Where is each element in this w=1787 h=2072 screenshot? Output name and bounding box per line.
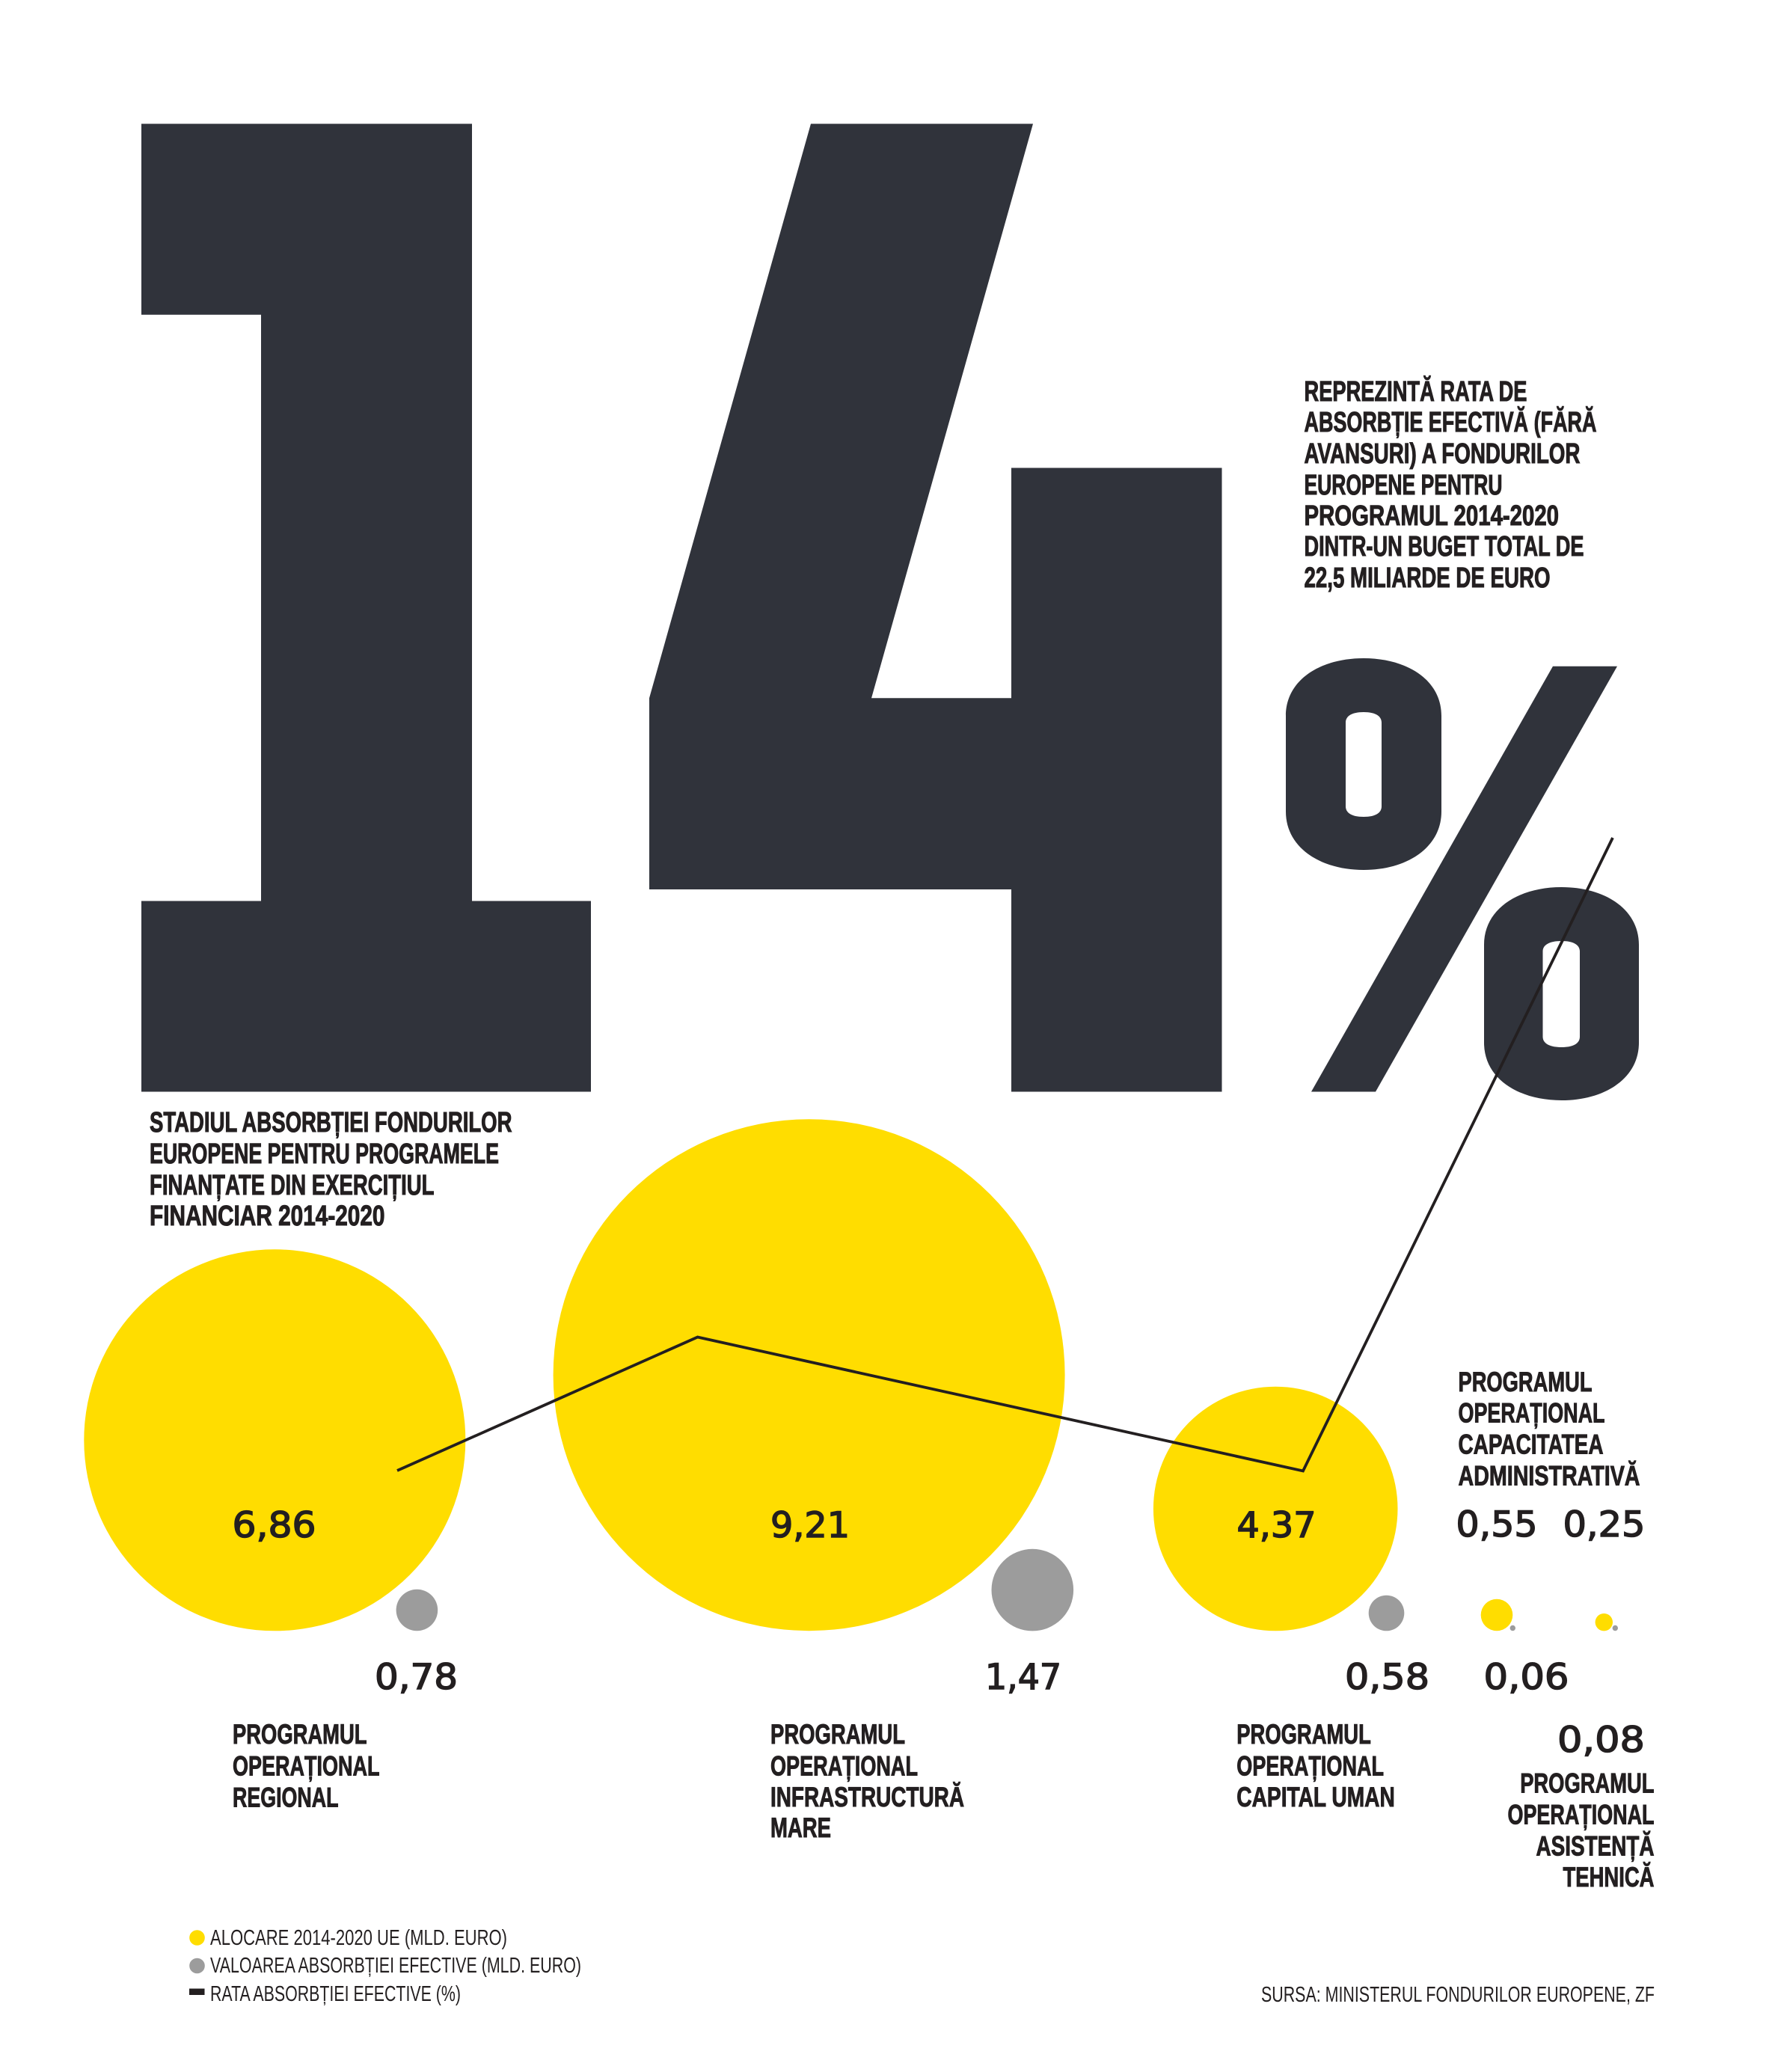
allocation: asistenta tehnica: [1596, 1613, 1613, 1631]
digit 1: [141, 124, 591, 1092]
label: programul operațional capacitatea administrativă: ADMINISTRATIVĂ: [1459, 1460, 1640, 1492]
heading: stadiul absorbției: STADIUL ABSORBȚIEI FONDURILOR: [150, 1107, 512, 1138]
text block: description of 14%: DINTR-UN BUGET TOTAL DE: [1305, 531, 1584, 563]
headline number: 14%: [141, 124, 1639, 1100]
allocation: infrastructura mare: [554, 1119, 1065, 1631]
legend: [189, 1926, 581, 2006]
value: 4,37: 4,37: [1237, 1505, 1317, 1546]
allocation: regional: [84, 1249, 465, 1631]
legend text: rata: RATA ABSORBȚIEI EFECTIVE (%): [210, 1982, 461, 2006]
legend marker: grey: [189, 1958, 205, 1973]
absorption: capacitatea administrativa: [1510, 1625, 1515, 1631]
label: programul operațional asistență tehnică: ASISTENȚĂ: [1536, 1831, 1655, 1863]
label: programul operațional capital uman: PROGRAMUL: [1236, 1719, 1371, 1750]
label: programul operațional regional: OPERAȚIONAL: [233, 1750, 380, 1782]
heading: stadiul absorbției: FINANȚATE DIN EXERCIȚIUL: [150, 1170, 434, 1201]
heading: stadiul absorbției: EUROPENE PENTRU PROGRAMELE: [150, 1138, 499, 1170]
label: programul operațional infrastructură mare: INFRASTRUCTURĂ: [770, 1782, 964, 1812]
label: programul operațional asistență tehnică: [1508, 1768, 1655, 1892]
legend marker: line: [189, 1988, 205, 1995]
label: programul operațional asistență tehnică: OPERAȚIONAL: [1508, 1800, 1655, 1831]
absorption: asistenta tehnica: [1613, 1625, 1618, 1631]
text block: description of 14%: [1305, 375, 1596, 594]
absorption: regional: [396, 1590, 438, 1631]
label: programul operațional capacitatea administrativă: [1459, 1367, 1640, 1492]
value: 0,08: 0,08: [1557, 1720, 1645, 1761]
allocation: capital uman: [1153, 1387, 1397, 1631]
line chart: effective absorption rate: [397, 838, 1613, 1471]
absorption: capital uman: [1369, 1596, 1404, 1631]
value: 9,21: 9,21: [770, 1505, 850, 1546]
label: programul operațional regional: PROGRAMUL: [233, 1719, 367, 1750]
text block: description of 14%: AVANSURI) A FONDURILOR: [1305, 438, 1580, 470]
value: 0,78: 0,78: [375, 1657, 458, 1698]
label: programul operațional capital uman: [1236, 1719, 1395, 1812]
label: programul operațional infrastructură mare: [770, 1719, 964, 1843]
bubble chart: allocation circles: [84, 1119, 1613, 1631]
heading: stadiul absorbției: FINANCIAR 2014-2020: [150, 1201, 384, 1232]
value labels: [232, 1504, 1646, 1761]
label: programul operațional capacitatea administrativă: PROGRAMUL: [1459, 1367, 1592, 1397]
label: programul operațional capital uman: OPERAȚIONAL: [1236, 1750, 1384, 1782]
label: programul operațional regional: REGIONAL: [233, 1782, 338, 1813]
absorption: infrastructura mare: [992, 1549, 1073, 1631]
text block: description of 14%: 22,5 MILIARDE DE EURO: [1305, 563, 1550, 594]
source note: SURSA: MINISTERUL FONDURILOR EUROPENE, ZF: [1261, 1983, 1655, 2007]
label: programul operațional capacitatea administrativă: OPERAȚIONAL: [1459, 1397, 1605, 1429]
value: 1,47: 1,47: [985, 1657, 1061, 1698]
label: programul operațional infrastructură mare: MARE: [770, 1812, 831, 1843]
value: 0,58: 0,58: [1345, 1657, 1429, 1698]
label: programul operațional capacitatea administrativă: CAPACITATEA: [1459, 1429, 1604, 1460]
label: programul operațional asistență tehnică: TEHNICĂ: [1563, 1862, 1655, 1892]
allocation: capacitatea administrativa: [1481, 1599, 1512, 1631]
legend text: valoarea: VALOAREA ABSORBȚIEI EFECTIVE (MLD. EURO): [210, 1954, 581, 1978]
text block: description of 14%: ABSORBȚIE EFECTIVĂ (FĂRĂ: [1305, 405, 1596, 438]
label: programul operațional capital uman: CAPITAL UMAN: [1236, 1782, 1395, 1812]
value: 0,06: 0,06: [1484, 1657, 1569, 1698]
value: 0,55: 0,55: [1456, 1504, 1538, 1545]
label: programul operațional infrastructură mare: PROGRAMUL: [770, 1719, 905, 1750]
text block: description of 14%: EUROPENE PENTRU: [1305, 470, 1502, 501]
text block: description of 14%: REPREZINTĂ RATA DE: [1305, 375, 1527, 408]
text block: description of 14%: PROGRAMUL 2014-2020: [1305, 500, 1559, 532]
heading: stadiul absorbției: [150, 1107, 512, 1232]
label: programul operațional regional: [233, 1719, 380, 1813]
bubble chart: effective absorption circles: [396, 1549, 1618, 1631]
percent sign: [1286, 658, 1639, 1100]
value: 0,25: 0,25: [1563, 1504, 1646, 1545]
digit 4: [649, 124, 1222, 1092]
value: 6,86: 6,86: [232, 1505, 316, 1546]
legend marker: yellow: [189, 1930, 205, 1946]
label: programul operațional asistență tehnică: PROGRAMUL: [1520, 1768, 1655, 1798]
legend text: alocare: ALOCARE 2014-2020 UE (MLD. EURO): [210, 1926, 507, 1950]
label: programul operațional infrastructură mare: OPERAȚIONAL: [770, 1750, 918, 1782]
